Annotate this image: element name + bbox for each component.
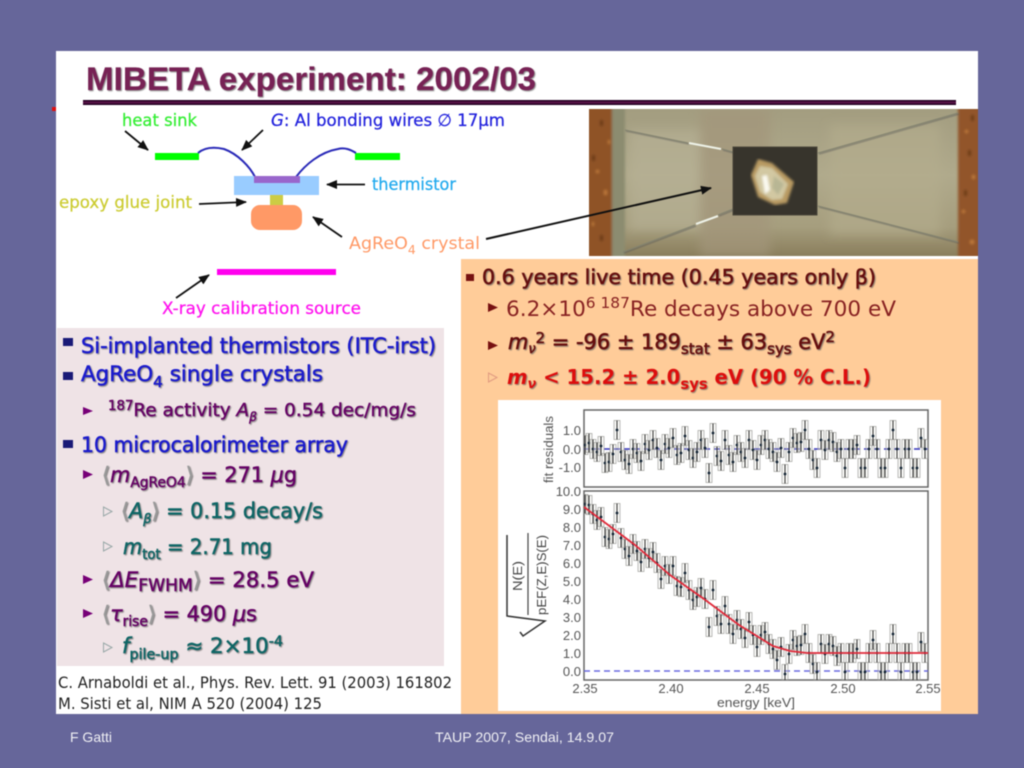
text: activity: 187 (108, 399, 133, 414)
y tick labels: 2.0 (563, 628, 581, 643)
references (58, 673, 452, 713)
text: array: 10 microcalorimeter array (81, 433, 348, 457)
x tick labels: 2.55 (915, 681, 941, 696)
residuals y title: fit residuals (541, 415, 556, 483)
x tick labels: 2.45 (744, 681, 770, 696)
y tick labels: 3.0 (563, 610, 581, 625)
white slide panel (56, 51, 978, 714)
y tick labels: 9.0 (563, 502, 581, 517)
text: decays: 6 187 (586, 294, 630, 312)
heat sink label: heat sink (122, 111, 197, 131)
epoxy label: epoxy glue joint (59, 193, 192, 213)
text: mass squared: 2 (536, 329, 545, 347)
title rule (83, 100, 956, 105)
panel: detector diagram (59, 111, 505, 319)
text: mass: ⟨m (102, 463, 131, 487)
text: pile-up: ≈ 2×10 (179, 634, 269, 658)
bullet (466, 274, 474, 281)
text: total mass: tot (142, 547, 161, 563)
glue joint (270, 195, 283, 205)
text: mass limit: eV (90 % C.L.) (708, 365, 871, 389)
text: total mass: m (123, 535, 142, 559)
bullets (63, 338, 73, 448)
red marker (52, 107, 56, 111)
photo of detector (585, 105, 982, 260)
crystal label: crystal (416, 234, 480, 254)
text: mass limit: m (507, 365, 528, 389)
outline sub-bullets (104, 507, 112, 652)
text: mass: ⟩ (186, 463, 194, 487)
text: mass limit: ν (528, 377, 536, 392)
text: energy resolution: ⟩ (193, 568, 201, 592)
text: mass limit: sys (680, 375, 708, 393)
text: energy resolution: = 28.5 eV (208, 568, 313, 592)
y tick labels: 1.0 (563, 646, 581, 661)
text: pile-up: f (122, 634, 133, 658)
text: crystals: single crystals (163, 362, 323, 386)
text: activity: Re activity (133, 400, 236, 421)
x tick labels: 2.40 (658, 681, 684, 696)
y tick labels: 6.0 (563, 556, 581, 571)
text: activity per detector: = 0.15 decay/s (166, 499, 325, 523)
residuals plot (541, 410, 928, 487)
fit curve (584, 507, 928, 653)
heat sink bars (155, 153, 400, 160)
residuals axis labels (559, 423, 581, 475)
text: activity per detector: ⟨A (121, 499, 143, 523)
residuals axis labels: 0.0 (563, 442, 581, 457)
text: mass squared: 2 (825, 328, 835, 346)
text: rise time: ⟩ (148, 602, 156, 626)
text: rise time: = 490 μs (163, 602, 257, 626)
y tick labels: 4.0 (563, 592, 581, 607)
text: mass: AgReO4 (130, 475, 186, 491)
arrow: crystal label to photo (486, 188, 711, 239)
text: activity per detector: β (142, 512, 151, 527)
text: pile-up: -4 (269, 634, 283, 650)
text: activity: A (235, 400, 249, 421)
text: crystals: 4 (153, 373, 163, 391)
outline sub-bullet (488, 373, 497, 382)
spectrum plot (507, 484, 941, 710)
text: energy resolution: FWHM (138, 576, 193, 596)
text: activity: = 0.54 dec/mg/s (257, 400, 416, 421)
text: rise time: rise (123, 614, 148, 630)
thermistor label: thermistor (372, 175, 456, 195)
y tick labels: 5.0 (563, 574, 581, 589)
y axis formula (507, 533, 549, 636)
panel: results (461, 259, 978, 714)
y tick labels: 7.0 (563, 538, 581, 553)
text: mass limit: < 15.2 ± 2.0 (536, 365, 680, 389)
residuals axis labels: 1.0 (563, 423, 581, 438)
text: activity: β (248, 410, 257, 424)
residuals axis labels: -1.0 (559, 460, 581, 475)
text: mass squared: stat (681, 340, 710, 358)
sub-bullets (488, 303, 498, 350)
text: rise time: ⟨τ (102, 602, 123, 626)
title: MIBETA experiment: 2002/03 (86, 61, 536, 97)
y tick labels (556, 484, 581, 679)
text: mass squared: eV (792, 330, 826, 354)
crystal label: AgReO (349, 234, 406, 254)
text: total mass: = 2.71 mg (161, 535, 272, 559)
footer: author: F Gatti (70, 729, 112, 745)
y tick labels: 10.0 (556, 484, 581, 499)
x tick labels: 2.50 (830, 681, 856, 696)
references: M. Sisti et al, NIM A 520 (2004) 125 (58, 694, 322, 713)
x tick labels (572, 681, 941, 696)
y tick labels: 0.0 (563, 664, 581, 679)
panel: thermistor parameters (57, 328, 444, 666)
text: activity per detector: ⟩ (151, 499, 160, 523)
text: mass squared: ± 63 (710, 330, 767, 354)
text: mass squared: m (508, 330, 528, 354)
x tick labels: 2.35 (572, 681, 598, 696)
text: mass: = 271 μg (201, 463, 297, 487)
text: mass squared: sys (767, 340, 792, 358)
X-ray label: X-ray calibration source (162, 299, 361, 319)
chart: beta spectrum fit (498, 400, 941, 711)
bonding wires (198, 148, 356, 177)
y axis formula: N(E) (510, 561, 525, 591)
thermistor block (234, 176, 319, 195)
y axis formula: pEF(Z,E)S(E) (534, 535, 549, 615)
text: crystals: AgReO (81, 362, 152, 386)
diagram arrows (125, 130, 365, 298)
bonding wires label: G: Al bonding wires ∅ 17μm (271, 111, 505, 131)
text: pile-up: pile-up (130, 647, 179, 663)
text: energy resolution: ⟨ΔE (102, 568, 138, 592)
crystal label: 4 (408, 243, 416, 257)
text: thermistors: Si-implanted thermistors (ITC-irst) (81, 334, 436, 358)
text: decays: Re decays above 700 eV (630, 297, 897, 321)
text: mass squared: = -96 ± 189 (545, 330, 681, 354)
thermistor contact (254, 176, 300, 183)
text: mass squared: ν (528, 342, 536, 357)
text: decays: 6.2×10 (506, 297, 584, 321)
footer: conference: TAUP 2007, Sendai, 14.9.07 (435, 729, 614, 745)
references: C. Arnaboldi et al., Phys. Rev. Lett. 91 (2003) 161802 (58, 673, 452, 692)
x axis title: energy [keV] (717, 695, 795, 710)
text: live time: 0.6 years live time (0.45 years only β) (482, 265, 876, 289)
y tick labels: 8.0 (563, 520, 581, 535)
crystal (251, 205, 302, 230)
sub-bullets (83, 407, 93, 618)
calibration source bar (217, 269, 336, 275)
